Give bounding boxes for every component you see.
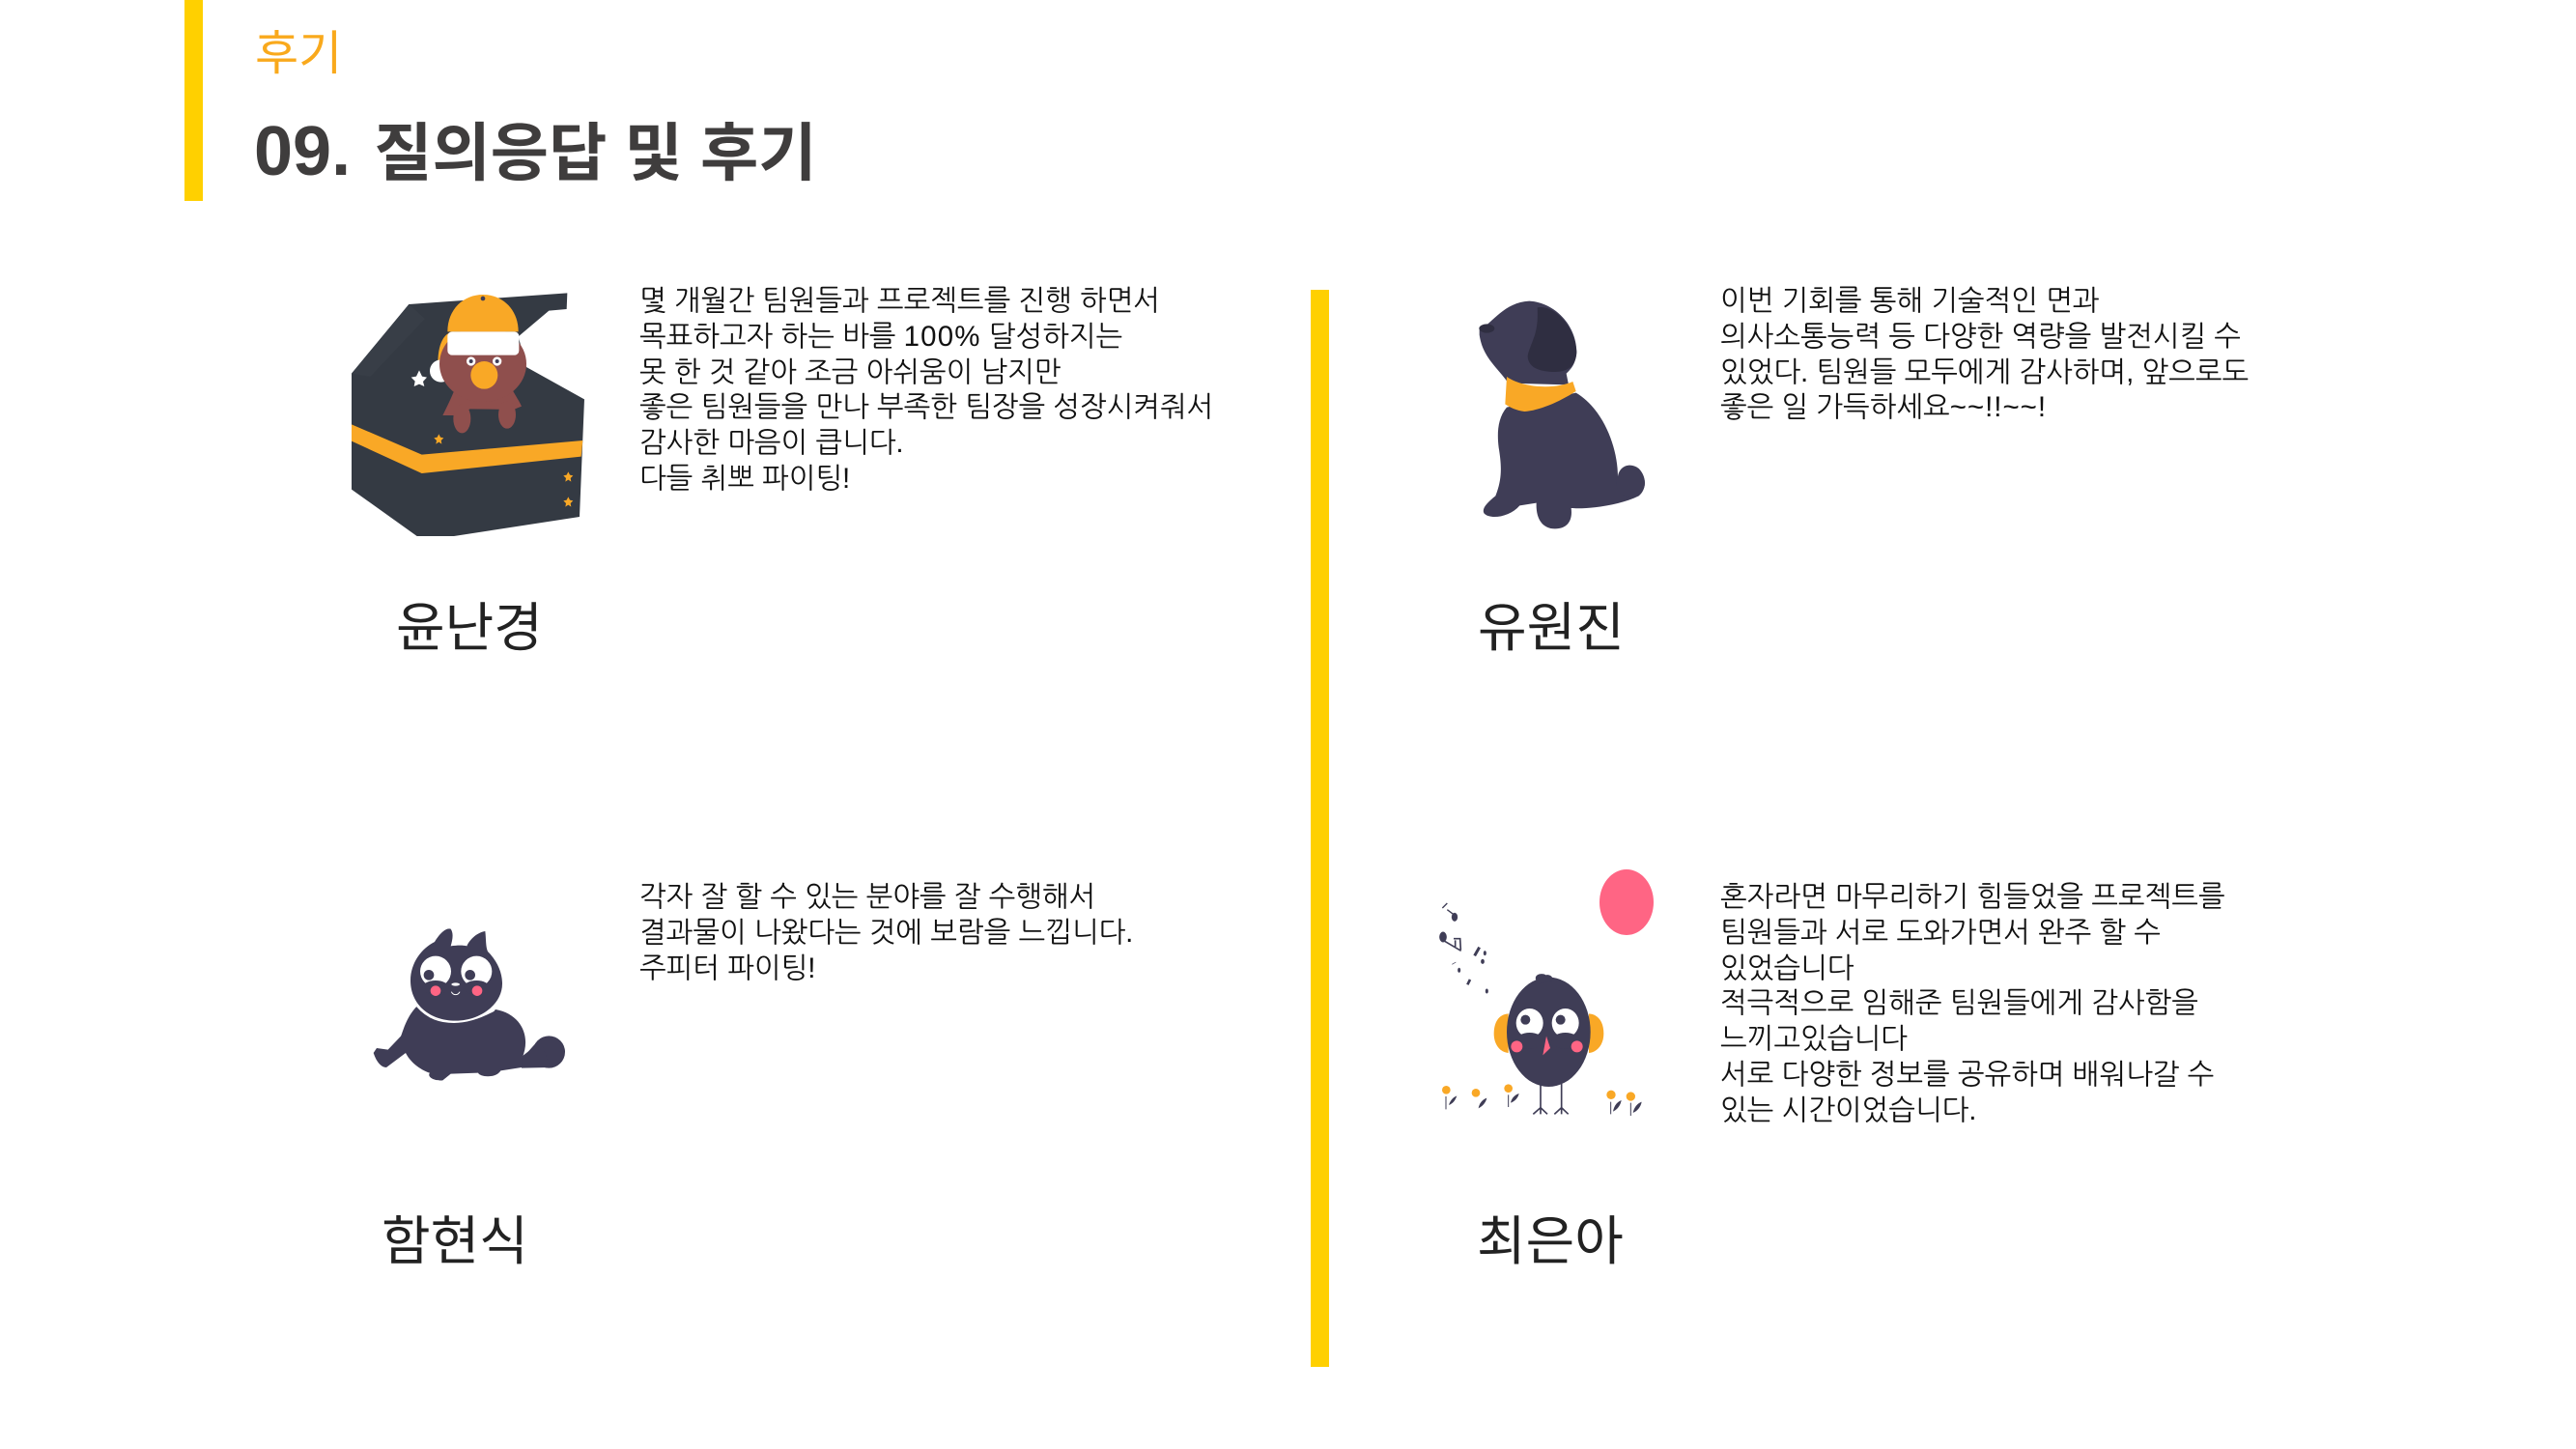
text: 함현식 review: 결과물이 나왔다는 것에 보람을 느낍니다.: [639, 917, 1133, 949]
text: 최은아 review: 있었습니다: [1720, 952, 1854, 983]
name: 함현식: 함현식: [382, 1211, 528, 1271]
headphones: [1494, 1013, 1509, 1053]
text: 함현식 review: 주피터 파이팅!: [639, 952, 815, 983]
bear: [430, 295, 526, 433]
text: 유원진 review: 의사소통능력 등 다양한 역량을 발전시킬 수: [1720, 321, 2241, 353]
section label: 후기: [255, 28, 342, 80]
name: 최은아: 최은아: [1477, 1211, 1624, 1271]
stars: [411, 370, 573, 507]
music notes: [1439, 903, 1488, 993]
text: 윤난경 review: 다들 취뽀 파이팅!: [639, 463, 850, 495]
text: 함현식 review: [639, 881, 1133, 983]
text: 최은아 review: 적극적으로 임해준 팀원들에게 감사함을: [1720, 987, 2198, 1019]
text: 유원진 review: 좋은 일 가득하세요~~!!~~!: [1720, 391, 2047, 423]
text: 윤난경 review: 몇 개월간 팀원들과 프로젝트를 진행 하면서: [639, 285, 1160, 317]
text: 윤난경 review: [639, 285, 1213, 495]
text: 최은아 review: 팀원들과 서로 도와가면서 완주 할 수: [1720, 917, 2161, 949]
text: 유원진 review: 이번 기회를 통해 기술적인 면과: [1720, 285, 2099, 317]
bird body: [1507, 978, 1591, 1087]
text: 유원진 review: [1720, 285, 2249, 423]
text: 윤난경 review: 좋은 팀원들을 만나 부족한 팀장을 성장시켜줘서: [639, 391, 1213, 423]
text: 유원진 review: 있었다. 팀원들 모두에게 감사하며, 앞으로도: [1720, 355, 2249, 388]
name: 유원진: 유원진: [1478, 598, 1625, 658]
text: 최은아 review: 서로 다양한 정보를 공유하며 배워나갈 수: [1720, 1059, 2214, 1091]
flowers: [1442, 1084, 1642, 1116]
center divider: [1311, 290, 1329, 1367]
text: 최은아 review: [1720, 881, 2225, 1126]
text: 최은아 review: 있는 시간이었습니다.: [1720, 1094, 1976, 1126]
title: 09. 질의응답 및 후기: [254, 113, 817, 190]
text: 최은아 review: 느끼고있습니다: [1720, 1023, 1908, 1055]
text: 최은아 review: 혼자라면 마무리하기 힘들었을 프로젝트를: [1720, 881, 2225, 913]
name: 윤난경: 윤난경: [396, 598, 543, 658]
text: 윤난경 review: 못 한 것 같아 조금 아쉬움이 남지만: [639, 355, 1061, 388]
heading accent bar: [184, 0, 203, 201]
text: 윤난경 review: 감사한 마음이 큽니다.: [639, 427, 904, 459]
box body: [352, 293, 584, 536]
text: 함현식 review: 각자 잘 할 수 있는 분야를 잘 수행해서: [639, 881, 1095, 913]
text: 윤난경 review: 목표하고자 하는 바를 100% 달성하지는: [639, 321, 1122, 353]
legs: [1533, 1084, 1569, 1114]
